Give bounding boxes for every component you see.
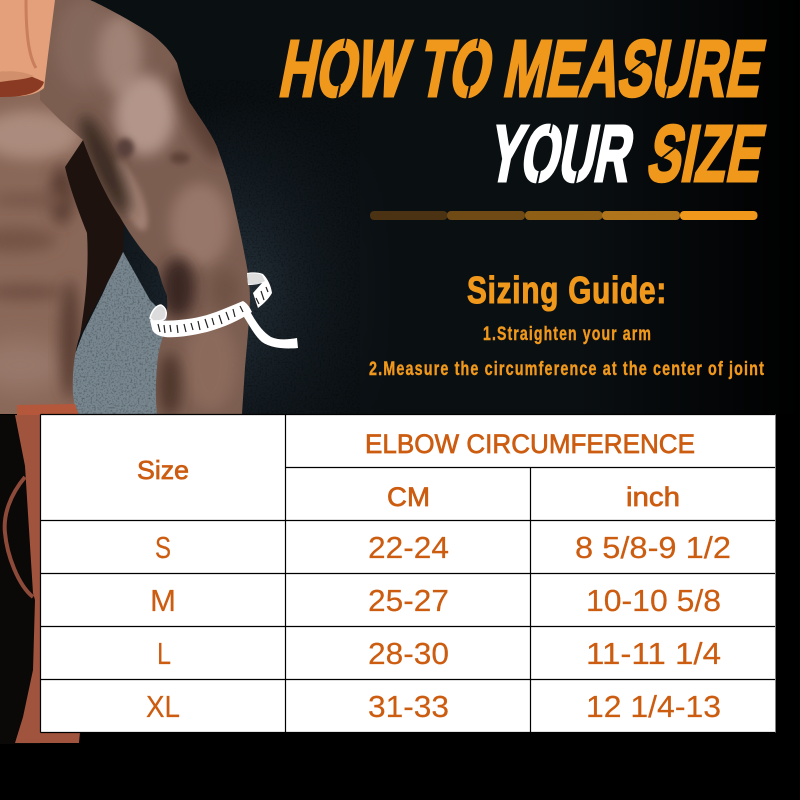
row L: 28-30	[368, 636, 449, 671]
header: cm: CM	[387, 482, 430, 512]
row S	[155, 530, 731, 565]
header: elbow circumference: ELBOW CIRCUMFERENCE	[365, 429, 695, 459]
row XL	[146, 689, 721, 724]
heading: sizing guide: Sizing Guide:	[467, 270, 667, 312]
row XL: 31-33	[368, 689, 449, 724]
row L: 11-11 1/4	[586, 636, 721, 671]
row M	[150, 583, 721, 618]
row S: 8 5/8-9 1/2	[575, 530, 731, 565]
arm	[40, 0, 250, 414]
figure: athlete measuring elbow	[0, 0, 260, 744]
row M: 25-27	[368, 583, 449, 618]
row S: S	[155, 530, 171, 565]
icon: measuring tape	[150, 272, 298, 348]
header: inch: inch	[626, 482, 680, 512]
tail	[244, 308, 298, 348]
shorts	[0, 404, 80, 744]
progress divider bar	[370, 211, 758, 220]
row L: L	[157, 636, 171, 671]
orange tank top	[0, 0, 55, 97]
table grid	[40, 414, 776, 732]
row L	[157, 636, 721, 671]
header: size: Size	[137, 455, 189, 485]
row M: 10-10 5/8	[586, 583, 721, 618]
tape ticks	[158, 287, 268, 333]
gray backdrop between arm and torso	[70, 250, 168, 414]
dark armpit shadow	[62, 140, 124, 336]
title line: your: YOUR	[483, 110, 641, 199]
inner oval	[150, 305, 166, 321]
title	[274, 25, 772, 199]
torso	[0, 90, 88, 414]
instruction 1: 1.Straighten your arm	[483, 324, 652, 345]
size table	[40, 414, 776, 732]
row XL: 12 1/4-13	[586, 689, 721, 724]
row M: M	[150, 583, 176, 618]
front band	[150, 301, 252, 337]
row S: 22-24	[368, 530, 449, 565]
row XL: XL	[146, 689, 180, 724]
back strap	[247, 272, 272, 308]
